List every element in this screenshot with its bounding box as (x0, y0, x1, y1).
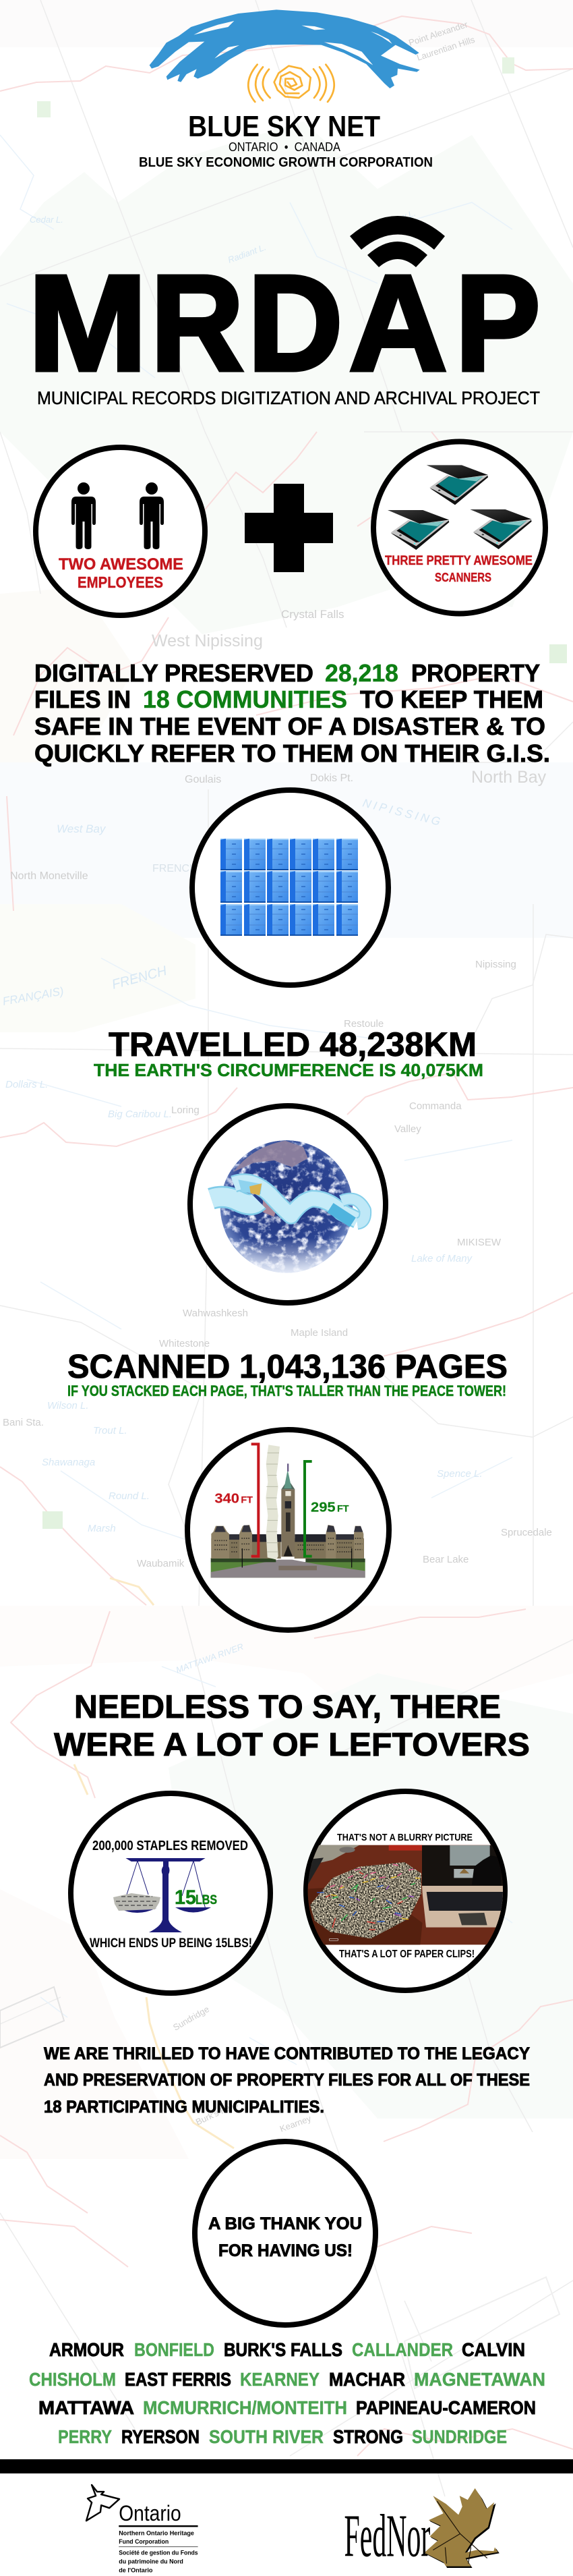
text: Northern Ontario Heritage Fund Corporation: Fund Corporation (119, 2538, 169, 2546)
map background: Maple Island (291, 1327, 348, 1339)
list: participating municipalities: SOUTH RIVER (209, 2426, 324, 2447)
text block: thrilled (44, 2044, 530, 2117)
bracket: 295ft: 295 (311, 1500, 336, 1515)
list: participating municipalities: KEARNEY (240, 2369, 320, 2390)
title: MRDAP: P (456, 247, 541, 399)
icon: orange sound spiral (248, 65, 334, 102)
map background: Radiant L. (227, 242, 268, 265)
map background: Sprucedale (501, 1527, 552, 1538)
text block: thrilled: WE ARE THRILLED TO HAVE CONTRIBUTED TO THE LEGACY (44, 2044, 530, 2063)
text block: digitally preserved: PROPERTY (411, 659, 540, 687)
text block: digitally preserved: SAFE IN THE EVENT OF A DISASTER & TO (34, 712, 545, 740)
map background: Wahwashkesh (183, 1308, 248, 1319)
map background: Nipissing (475, 959, 516, 970)
map background: Kearney (278, 2113, 313, 2134)
label: 15 pounds (175, 1886, 217, 1909)
title: MRDAP: M (28, 247, 147, 399)
map background: FRANÇAIS) (1, 984, 65, 1008)
panel: three pretty awesome scanners (373, 441, 545, 614)
map background: Lake of Many (411, 1253, 473, 1264)
panel: globe with measuring tape (190, 1106, 386, 1303)
map background: Restoule (344, 1018, 384, 1030)
list: participating municipalities: ARMOUR (49, 2339, 124, 2360)
map background: North Bay (471, 768, 547, 787)
list: participating municipalities: MACHAR (329, 2369, 405, 2390)
panel: thank you (195, 2141, 375, 2325)
icon: measuring tape (211, 1179, 365, 1223)
panel: peace tower comparison (187, 1430, 389, 1630)
icon: three scanners (388, 465, 532, 550)
map background: Cedar L. (30, 215, 63, 225)
panel: filing cabinets (192, 790, 388, 985)
logo: Blue Sky Net (139, 9, 433, 170)
panel: two awesome employees (36, 447, 205, 615)
text: Northern Ontario Heritage Fund Corporation (119, 2529, 195, 2546)
label: 15 pounds: 15 (175, 1886, 196, 1909)
map background: Bear Lake (423, 1554, 469, 1565)
label: a lot of paper clips: THAT'S A LOT OF PAPER CLIPS! (339, 1949, 475, 1960)
text block: digitally preserved: TO KEEP THEM (360, 685, 543, 713)
text block: digitally preserved: 28,218 (325, 659, 398, 687)
map background: Trout L. (93, 1425, 127, 1436)
text: Société de gestion: du patrimoine du Nord (119, 2558, 183, 2566)
map background: Waubamik (137, 1558, 185, 1569)
list: participating municipalities: CALLANDER (352, 2339, 453, 2360)
map background: Round L. (109, 1490, 150, 1502)
subtitle: MUNICIPAL RECORDS DIGITIZATION AND ARCHIVAL PROJECT (37, 388, 540, 408)
map background: Goulais (185, 774, 221, 785)
text: Société de gestion (119, 2550, 198, 2574)
label: not a blurry picture: THAT'S NOT A BLURRY PICTURE (337, 1832, 473, 1843)
map background: Loring (171, 1104, 200, 1116)
icon: plus sign (245, 484, 333, 572)
heading: scanned pages: SCANNED 1,043,136 PAGES (67, 1349, 508, 1385)
text block: digitally preserved (34, 659, 550, 767)
map background: Bani Sta. (3, 1417, 44, 1428)
label: two awesome employees: TWO AWESOME (59, 555, 183, 573)
map background: Burk's Falls (194, 2099, 239, 2127)
label: 15 pounds: LBS (195, 1893, 217, 1907)
map background: Wilson L. (47, 1400, 89, 1411)
map background: West Nipissing (152, 632, 263, 650)
list: participating municipalities: BURK'S FALLS (224, 2339, 342, 2360)
text block: digitally preserved: FILES IN (34, 685, 131, 713)
illustration: stack of paper (266, 1445, 280, 1560)
list: participating municipalities: PAPINEAU-CAMERON (356, 2397, 536, 2418)
list: participating municipalities: STRONG (333, 2426, 403, 2447)
logo: FedNor: FedNor (344, 2501, 430, 2569)
bracket: 340ft (214, 1444, 258, 1557)
map background: FRENCH (111, 963, 169, 992)
list: participating municipalities: CALVIN (462, 2339, 525, 2360)
title: MRDAP: R (151, 247, 244, 399)
map background: Valley (394, 1123, 421, 1135)
footer band (0, 2459, 573, 2473)
map background: North Monetville (10, 870, 88, 882)
list: participating municipalities: PERRY (58, 2426, 112, 2447)
label: three pretty awesome scanners: THREE PRETTY AWESOME (385, 554, 533, 568)
map background: Clemow L. (375, 208, 417, 231)
text block: digitally preserved: QUICKLY REFER TO THEM ON THEIR G.I.S. (34, 739, 550, 767)
list: participating municipalities: MCMURRICH/MONTEITH (143, 2397, 347, 2418)
heading: travelled: TRAVELLED 48,238KM (109, 1026, 477, 1063)
subheading: earth circumference: THE EARTH'S CIRCUMFERENCE IS 40,075KM (94, 1060, 483, 1080)
map background: Point Alexander (407, 19, 469, 48)
text block: thrilled: 18 PARTICIPATING MUNICIPALITIES. (44, 2098, 324, 2117)
icon: balance scale (113, 1859, 211, 1932)
map background: MIKISEW (457, 1237, 502, 1248)
text block: digitally preserved: DIGITALLY PRESERVED (34, 659, 313, 687)
map background: Sundridge (171, 2004, 211, 2033)
bracket: 295ft (305, 1461, 349, 1557)
label: three pretty awesome scanners (385, 554, 533, 584)
map background: FRENCH (152, 863, 198, 874)
label: two awesome employees (59, 555, 183, 591)
map background: Dokis Pt. (310, 773, 353, 784)
location line: ONTARIO • CANADA (229, 140, 340, 154)
map background: Crystal Falls (281, 608, 344, 621)
title: MRDAP: A (349, 247, 448, 399)
map background: Whitestone (159, 1338, 210, 1349)
icon: wifi signal (350, 216, 445, 267)
panel: staples on a scale (71, 1793, 270, 1993)
wordmark: Blue Sky Net: BLUE SKY NET (188, 110, 380, 143)
photo: paper clips and laptop (303, 1845, 512, 1944)
icon: two people (71, 482, 164, 549)
map background: West Bay (57, 822, 107, 835)
map background: Big Caribou L. (108, 1109, 172, 1120)
map background: Dollars L. (5, 1079, 48, 1090)
list: participating municipalities: SUNDRIDGE (412, 2426, 507, 2447)
logo: Ontario (86, 2485, 198, 2574)
label: three pretty awesome scanners: SCANNERS (435, 571, 491, 584)
map background: Spence L. (437, 1468, 483, 1480)
text: thank you (208, 2214, 362, 2260)
text: Northern Ontario Heritage Fund Corporation: Northern Ontario Heritage (119, 2529, 195, 2537)
bracket: 295ft: FT (337, 1503, 349, 1514)
list: participating municipalities: CHISHOLM (29, 2369, 116, 2390)
bracket: 340ft: 340 (214, 1491, 239, 1507)
list: participating municipalities: MATTAWA (38, 2397, 134, 2418)
icon: blue sky brush stroke (150, 9, 420, 88)
panel: paper clips photo (303, 1791, 512, 1990)
label: ends up being 15 lbs: WHICH ENDS UP BEING 15LBS! (90, 1936, 252, 1951)
map background: MATTAWA RIVER (175, 1642, 245, 1675)
icon: trillium (86, 2485, 119, 2521)
map background: Laurentian Hills (415, 34, 477, 63)
map background: NIPISSING (361, 796, 444, 829)
heading: leftovers: NEEDLESS TO SAY, THERE (74, 1689, 501, 1725)
bracket: 340ft: FT (241, 1494, 253, 1505)
heading: leftovers (54, 1689, 530, 1763)
text block: thrilled: AND PRESERVATION OF PROPERTY FILES FOR ALL OF THESE (44, 2071, 530, 2090)
list: participating municipalities: EAST FERRIS (125, 2369, 231, 2390)
icon: earth (218, 1138, 357, 1277)
icon: maple leaf (424, 2488, 500, 2568)
list: participating municipalities: RYERSON (121, 2426, 200, 2447)
map background: Shawanaga (42, 1457, 95, 1468)
list: participating municipalities: BONFIELD (134, 2339, 214, 2360)
list: participating municipalities (29, 2339, 545, 2447)
label: two awesome employees: EMPLOYEES (78, 573, 163, 591)
text block: digitally preserved: 18 COMMUNITIES (143, 685, 347, 713)
icon: eighteen filing cabinets (220, 839, 358, 935)
heading: leftovers: WERE A LOT OF LEFTOVERS (54, 1727, 530, 1763)
label: staples removed: 200,000 STAPLES REMOVED (92, 1839, 248, 1853)
illustration: parliament building (211, 1463, 365, 1577)
text: Société de gestion: Société de gestion du Fonds (119, 2550, 198, 2557)
title: MRDAP: D (248, 247, 342, 399)
organization name: BLUE SKY ECONOMIC GROWTH CORPORATION (139, 155, 433, 170)
logo: MRDAP (28, 216, 541, 408)
wordmark: Ontario: Ontario (119, 2501, 181, 2525)
text: thank you: FOR HAVING US! (218, 2241, 353, 2260)
list: participating municipalities: MAGNETAWAN (414, 2369, 545, 2390)
map background: Marsh (88, 1523, 116, 1534)
text: Société de gestion: de l'Ontario (119, 2567, 153, 2574)
text: thank you: A BIG THANK YOU (208, 2214, 362, 2233)
map background: Commanda (409, 1100, 462, 1112)
